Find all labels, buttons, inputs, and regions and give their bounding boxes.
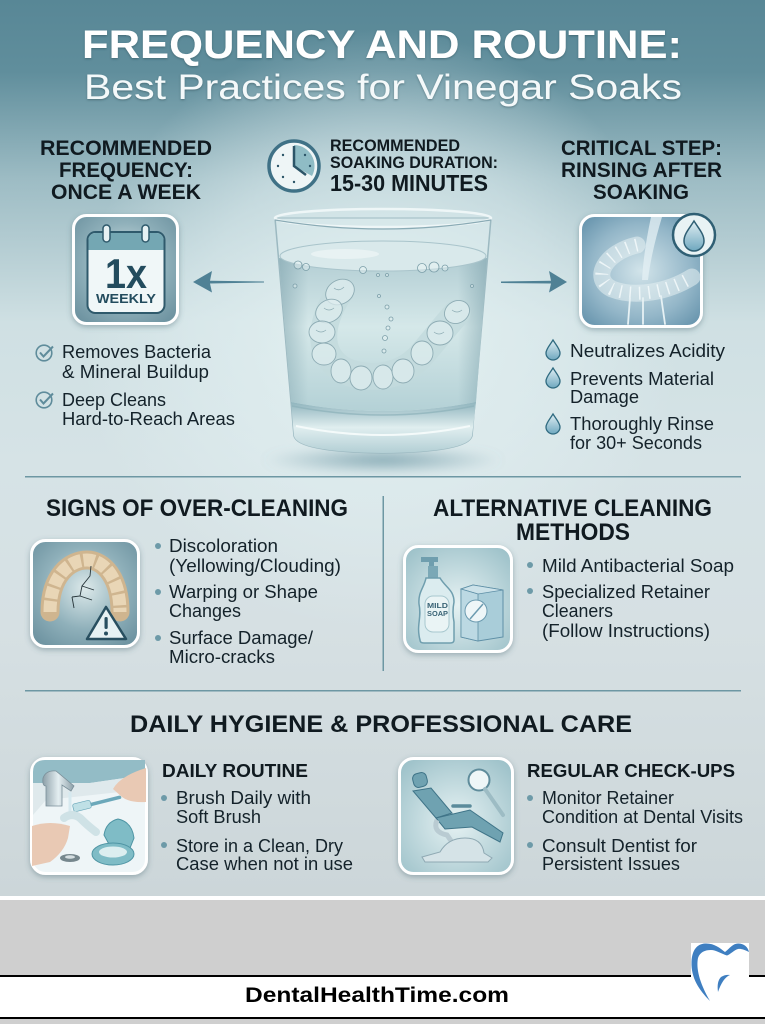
block: regular check-ups: Consult Dentist for: [542, 835, 697, 856]
list: rinsing benefits: Neutralizes Acidity: [570, 340, 726, 361]
icon: weekly calendar: 1x: [105, 250, 148, 297]
icon: soap and cleaner box: [404, 546, 512, 652]
heading: daily hygiene and professional care: DAILY HYGIENE & PROFESSIONAL CARE: [130, 711, 632, 738]
list: signs of over-cleaning: Changes: [169, 600, 241, 621]
icon: dental chair and magnifier: [400, 758, 512, 874]
heading: soaking duration: [330, 136, 498, 196]
block: daily routine: Store in a Clean, Dry: [176, 835, 344, 856]
icon: drop two: [546, 368, 560, 388]
block: regular check-ups: Persistent Issues: [542, 853, 680, 874]
list: signs of over-cleaning: [155, 535, 341, 667]
title: Best Practices for Vinegar Soaks: [84, 68, 682, 107]
block: daily routine: [161, 760, 353, 874]
heading: soaking duration: SOAKING DURATION:: [330, 153, 498, 172]
logo: tooth: [691, 943, 749, 1001]
rim: [275, 209, 491, 227]
list: signs of over-cleaning: (Yellowing/Clouding): [169, 555, 341, 576]
list: signs of over-cleaning: Discoloration: [169, 535, 278, 556]
icon: soap and cleaner box: SOAP: [427, 609, 448, 618]
list: alternative methods: Specialized Retainer: [542, 581, 710, 602]
heading: soaking duration: RECOMMENDED: [330, 136, 460, 155]
heading: alternative cleaning methods: ALTERNATIVE CLEANING: [433, 495, 712, 522]
icon: cracked retainer with warning: [32, 540, 138, 646]
block: regular check-ups: [527, 760, 743, 874]
list: rinsing benefits: [546, 340, 726, 453]
list: signs of over-cleaning: Warping or Shape: [169, 581, 318, 602]
arrow: left: [193, 271, 264, 292]
list: alternative methods: Mild Antibacterial Soap: [542, 555, 734, 576]
heading: recommended frequency: RECOMMENDED: [40, 137, 212, 160]
list: rinsing benefits: Thoroughly Rinse: [570, 413, 714, 434]
block: daily routine: Brush Daily with: [176, 787, 311, 808]
icon: daily routine sink scene: [32, 758, 146, 874]
heading: signs of over-cleaning: SIGNS OF OVER-CLEANING: [46, 495, 348, 522]
block: daily routine: DAILY ROUTINE: [162, 760, 308, 781]
list: frequency benefits: Removes Bacteria: [62, 341, 212, 362]
water: [279, 258, 487, 411]
list: alternative methods: (Follow Instructions): [542, 620, 710, 641]
icon: soap and cleaner box: MILD: [427, 601, 449, 610]
glass base: [291, 402, 476, 453]
icon: check two: [36, 392, 53, 408]
icon: drop three: [546, 414, 560, 434]
heading: recommended frequency: [40, 137, 212, 204]
bubbles: [293, 261, 474, 353]
list: rinsing benefits: Damage: [570, 386, 639, 407]
title: FREQUENCY AND ROUTINE:: [82, 23, 682, 67]
list: rinsing benefits: Prevents Material: [570, 368, 714, 389]
retainer: [309, 274, 474, 390]
heading: critical step: RINSING AFTER: [561, 159, 722, 182]
list: frequency benefits: Deep Cleans: [62, 389, 166, 410]
icon: water drop badge: [673, 214, 715, 256]
heading: alternative cleaning methods: [433, 495, 712, 546]
list: frequency benefits: & Mineral Buildup: [62, 361, 209, 382]
heading: recommended frequency: ONCE A WEEK: [51, 181, 201, 204]
footer website: DentalHealthTime.com: [245, 984, 509, 1007]
icon: clock: [269, 141, 319, 191]
title: [82, 23, 682, 107]
block: regular check-ups: REGULAR CHECK-UPS: [527, 760, 735, 781]
list: alternative methods: Cleaners: [542, 600, 613, 621]
heading: critical step: CRITICAL STEP:: [561, 137, 722, 160]
list: signs of over-cleaning: Micro-cracks: [169, 646, 275, 667]
arrow: right: [501, 271, 567, 292]
icon: warning triangle: [87, 607, 126, 639]
block: daily routine: Soft Brush: [176, 806, 261, 827]
block: regular check-ups: Condition at Dental Visits: [542, 806, 743, 827]
list: frequency benefits: [36, 341, 235, 429]
icon: check one: [36, 345, 53, 361]
footer band: [0, 896, 765, 1024]
list: alternative methods: [527, 555, 734, 641]
glass body: [275, 218, 491, 453]
heading: alternative cleaning methods: METHODS: [516, 519, 630, 546]
list: rinsing benefits: for 30+ Seconds: [570, 432, 702, 453]
icon: weekly calendar: WEEKLY: [96, 291, 156, 306]
list: frequency benefits: Hard-to-Reach Areas: [62, 408, 235, 429]
block: daily routine: Case when not in use: [176, 853, 353, 874]
heading: critical step: [561, 137, 722, 204]
heading: soaking duration: 15-30 MINUTES: [330, 170, 488, 196]
icon: rinsing retainer: [580, 214, 715, 326]
icon: weekly calendar: [74, 216, 178, 324]
heading: critical step: SOAKING: [593, 181, 689, 204]
list: signs of over-cleaning: Surface Damage/: [169, 627, 314, 648]
block: regular check-ups: Monitor Retainer: [542, 787, 674, 808]
glass of water with retainer: [263, 209, 503, 474]
heading: recommended frequency: FREQUENCY:: [59, 159, 193, 182]
icon: drop one: [546, 340, 560, 360]
